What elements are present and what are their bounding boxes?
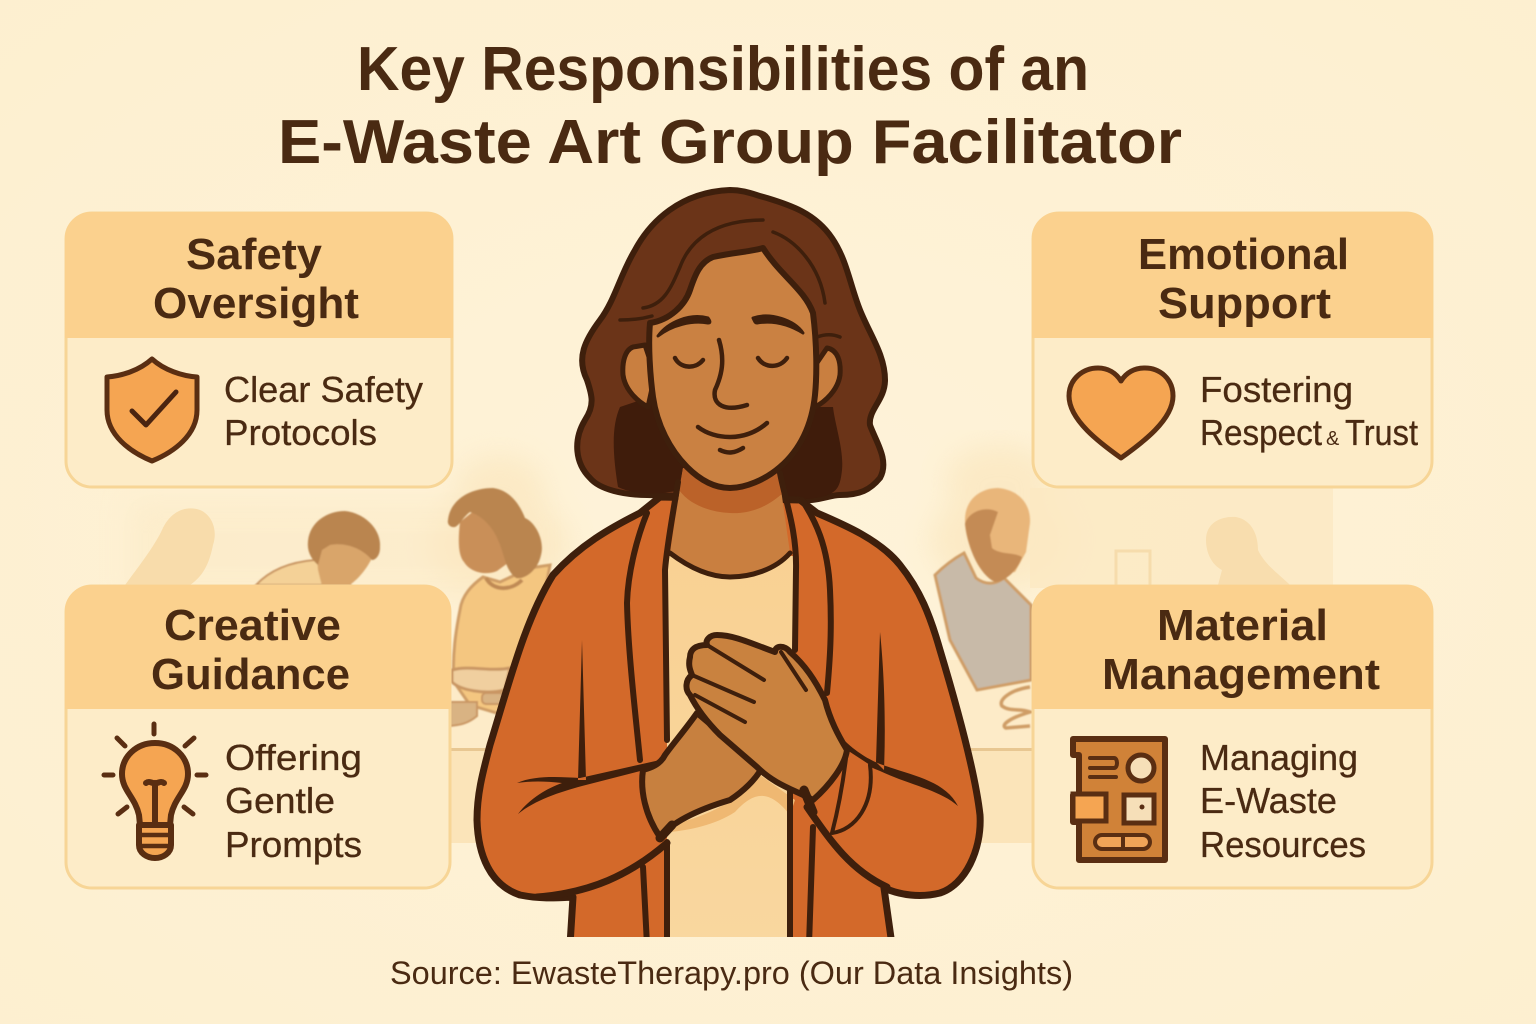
text: fostering respect and trust: Respect xyxy=(1200,412,1322,453)
text: offering gentle prompts: Offering xyxy=(225,737,362,778)
hair shadow xyxy=(614,397,842,499)
heading: material management xyxy=(1102,601,1380,699)
heading: emotional support: Emotional xyxy=(1138,230,1349,279)
text: clear safety protocols xyxy=(224,369,423,453)
text: managing e-waste resources xyxy=(1200,737,1366,865)
lower arm lines xyxy=(537,807,887,897)
eyebrows xyxy=(658,316,803,336)
face xyxy=(649,248,816,488)
background person: faint silhouette xyxy=(1206,517,1290,585)
heading: emotional support: Support xyxy=(1158,279,1331,328)
heading: safety oversight xyxy=(153,230,359,328)
background person: seated woman xyxy=(448,488,550,726)
background object: faint box xyxy=(1116,551,1150,587)
title: E-Waste Art Group Facilitator xyxy=(278,108,1182,177)
collar line xyxy=(670,553,790,577)
heading: safety oversight: Safety xyxy=(186,230,323,279)
text: fostering respect and trust: Fostering xyxy=(1200,369,1353,410)
background person: leaning man xyxy=(256,511,380,586)
hair strands xyxy=(620,220,840,337)
upper hand xyxy=(686,635,847,800)
finger lines xyxy=(692,645,806,722)
heading: creative guidance: Guidance xyxy=(151,650,350,699)
heading: safety oversight: Oversight xyxy=(153,279,359,328)
right cuff xyxy=(832,750,871,833)
background person: bearded man xyxy=(935,488,1031,728)
icon: shield with check xyxy=(107,359,197,461)
text: offering gentle prompts: Prompts xyxy=(225,824,362,865)
wrist knot xyxy=(660,790,813,838)
panel: creative guidance xyxy=(65,585,451,888)
panel: emotional support xyxy=(1032,212,1433,487)
text: clear safety protocols: Clear Safety xyxy=(224,369,423,410)
title: Key Responsibilities of an xyxy=(357,35,1089,104)
panel: material management xyxy=(1032,585,1433,888)
text: managing e-waste resources: Managing xyxy=(1200,737,1358,778)
icon: light bulb xyxy=(104,724,206,858)
heading: creative guidance xyxy=(151,601,350,699)
lower hand xyxy=(642,713,762,837)
text: clear safety protocols: Protocols xyxy=(224,412,377,453)
heading: material management: Management xyxy=(1102,650,1380,699)
text: offering gentle prompts xyxy=(225,737,362,865)
lapel lines xyxy=(627,473,831,945)
central facilitator figure xyxy=(477,190,980,945)
text: managing e-waste resources: E-Waste xyxy=(1200,780,1337,821)
text: fostering respect and trust: & xyxy=(1326,428,1340,450)
eyes, nose and mouth xyxy=(675,340,787,452)
text: offering gentle prompts: Gentle xyxy=(225,780,335,821)
icon: heart xyxy=(1069,368,1173,458)
title xyxy=(278,35,1182,177)
heading: material management: Material xyxy=(1157,601,1328,650)
hair xyxy=(577,190,885,500)
text: managing e-waste resources: Resources xyxy=(1200,824,1366,865)
torso cardigan xyxy=(477,497,980,945)
shirt shadow under hands xyxy=(670,775,795,832)
panel: safety oversight xyxy=(65,212,453,487)
neck xyxy=(670,468,790,577)
neck shadow xyxy=(679,468,784,513)
ears xyxy=(623,345,840,407)
text: fostering respect and trust: Trust xyxy=(1345,412,1418,453)
background scene: workshop table and haze xyxy=(130,445,1333,843)
icon: circuit board xyxy=(1073,739,1165,860)
source line: Source: EwasteTherapy.pro (Our Data Insights) xyxy=(390,955,1073,991)
heading: creative guidance: Creative xyxy=(164,601,341,650)
background person: faint woman xyxy=(125,508,215,585)
text: fostering respect and trust xyxy=(1200,369,1418,453)
right sleeve fold xyxy=(838,632,958,806)
left sleeve fold xyxy=(517,640,660,814)
heading: emotional support xyxy=(1138,230,1349,328)
shirt xyxy=(667,556,796,945)
